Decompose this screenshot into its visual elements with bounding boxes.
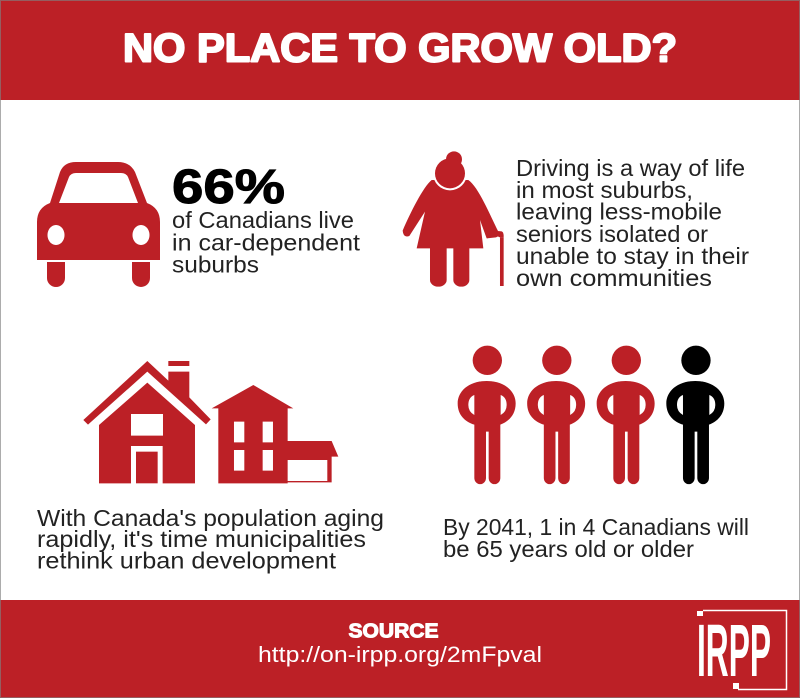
text: driving and seniors: seniors isolated or bbox=[516, 221, 708, 247]
stat: 66 percent: 66% bbox=[172, 161, 285, 214]
text: driving and seniors: leaving less-mobile bbox=[516, 198, 722, 224]
text: population aging: With Canada's population aging bbox=[37, 505, 384, 531]
stat: 66 percent bbox=[172, 161, 361, 278]
title: NO PLACE TO GROW OLD? bbox=[123, 26, 677, 70]
text: driving and seniors: own communities bbox=[516, 265, 712, 291]
person 3 bbox=[597, 346, 655, 484]
text: driving and seniors: Driving is a way of life bbox=[516, 155, 745, 181]
text: population aging bbox=[37, 505, 384, 574]
text: driving and seniors: unable to stay in their bbox=[516, 243, 749, 269]
header band bbox=[0, 0, 800, 100]
text: driving and seniors: in most suburbs, bbox=[516, 177, 693, 203]
source label: SOURCE bbox=[348, 620, 438, 642]
text: population aging: rapidly, it's time municipalities bbox=[37, 526, 366, 552]
icon: car bbox=[37, 162, 160, 287]
text: population aging: rethink urban development bbox=[37, 548, 337, 574]
text: car-dependent suburbs bbox=[172, 207, 361, 278]
icon: senior with cane bbox=[403, 151, 504, 287]
text: car-dependent suburbs: of Canadians live bbox=[172, 207, 354, 233]
person 1 bbox=[458, 346, 516, 484]
person 2 bbox=[527, 346, 585, 484]
icon row: four people bbox=[458, 346, 724, 484]
text: 2041 projection: be 65 years old or older bbox=[443, 536, 694, 562]
text: car-dependent suburbs: in car-dependent bbox=[172, 230, 361, 256]
source url: http://on-irpp.org/2mFpval bbox=[258, 642, 542, 667]
text: car-dependent suburbs: suburbs bbox=[172, 252, 259, 278]
text: 2041 projection bbox=[443, 514, 749, 562]
text: 2041 projection: By 2041, 1 in 4 Canadians will bbox=[443, 514, 749, 540]
person 4 highlighted in black bbox=[666, 346, 724, 484]
text: driving and seniors bbox=[516, 155, 749, 291]
icon: suburban houses bbox=[83, 361, 338, 483]
footer band bbox=[0, 600, 800, 698]
